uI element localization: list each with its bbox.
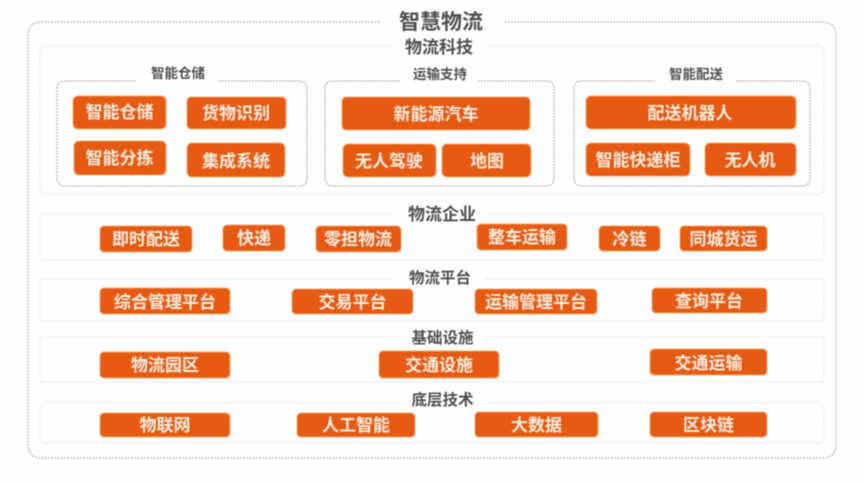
panel: infrastructure [40,329,824,382]
box [599,226,660,251]
box: 交易平台 [318,292,386,312]
box: 交通设施 [405,355,473,375]
box: 综合管理平台 [114,292,216,312]
box: 大数据 [511,416,562,435]
box [652,288,767,313]
box [342,97,530,130]
heading: 物流平台 [409,268,471,287]
box: 地图 [470,152,504,171]
box: 物联网 [140,416,190,435]
sub-heading: 智能仓储 [151,65,205,81]
box: 物流园区 [131,356,199,375]
box [705,143,796,176]
box: 集成系统 [202,151,270,171]
box: 区块链 [683,415,734,435]
box: 即时配送 [112,230,180,249]
box: 人工智能 [322,415,390,435]
heading: 物流企业 [408,204,476,224]
box: 无人驾驶 [355,152,423,171]
box [586,143,690,176]
box: 查询平台 [675,291,743,311]
box [650,349,767,375]
box: 智能仓储 [86,102,154,122]
box: 无人机 [724,151,776,170]
title: 智慧物流 [399,11,483,34]
sub-heading: 运输支持 [413,66,467,82]
box [100,288,230,314]
box: 零担物流 [324,230,392,249]
box: 新能源汽车 [394,104,478,124]
box: 整车运输 [488,227,556,247]
box: 配送机器人 [648,104,732,123]
box [650,412,767,437]
sub-panel: smart warehousing [57,65,307,186]
box [343,144,436,177]
heading: 底层技术 [411,390,474,409]
box: 智能快递柜 [596,150,680,170]
box: 货物识别 [202,103,270,123]
box [223,225,285,251]
heading: logistics technology: 物流科技 [405,38,473,57]
box: 冷链 [612,229,646,249]
box [100,226,192,252]
sub-heading: 智能配送 [669,66,723,82]
box [475,289,597,314]
box [292,289,413,314]
sub-panel: transport support [325,66,554,186]
panel: underlying technology [40,390,824,443]
box [477,224,567,250]
box: 智能分拣 [86,148,154,168]
box: 运输管理平台 [485,292,587,312]
box: 同城货运 [690,229,758,249]
box [316,226,401,252]
box [680,226,767,251]
box [187,143,285,177]
box [475,412,598,437]
box [379,351,499,378]
sub-panel: smart delivery [574,66,810,186]
panel: logistics platforms [40,268,824,321]
box: 交通运输 [674,353,742,373]
box [74,141,166,175]
box [187,97,286,129]
box [100,413,230,437]
box [297,413,415,437]
box [586,96,796,129]
box: 快递 [237,228,271,248]
heading: 基础设施 [411,329,474,347]
panel: logistics technology [40,38,824,195]
box [73,96,166,129]
box [442,144,531,177]
panel: logistics companies [40,204,824,260]
box [100,352,230,378]
